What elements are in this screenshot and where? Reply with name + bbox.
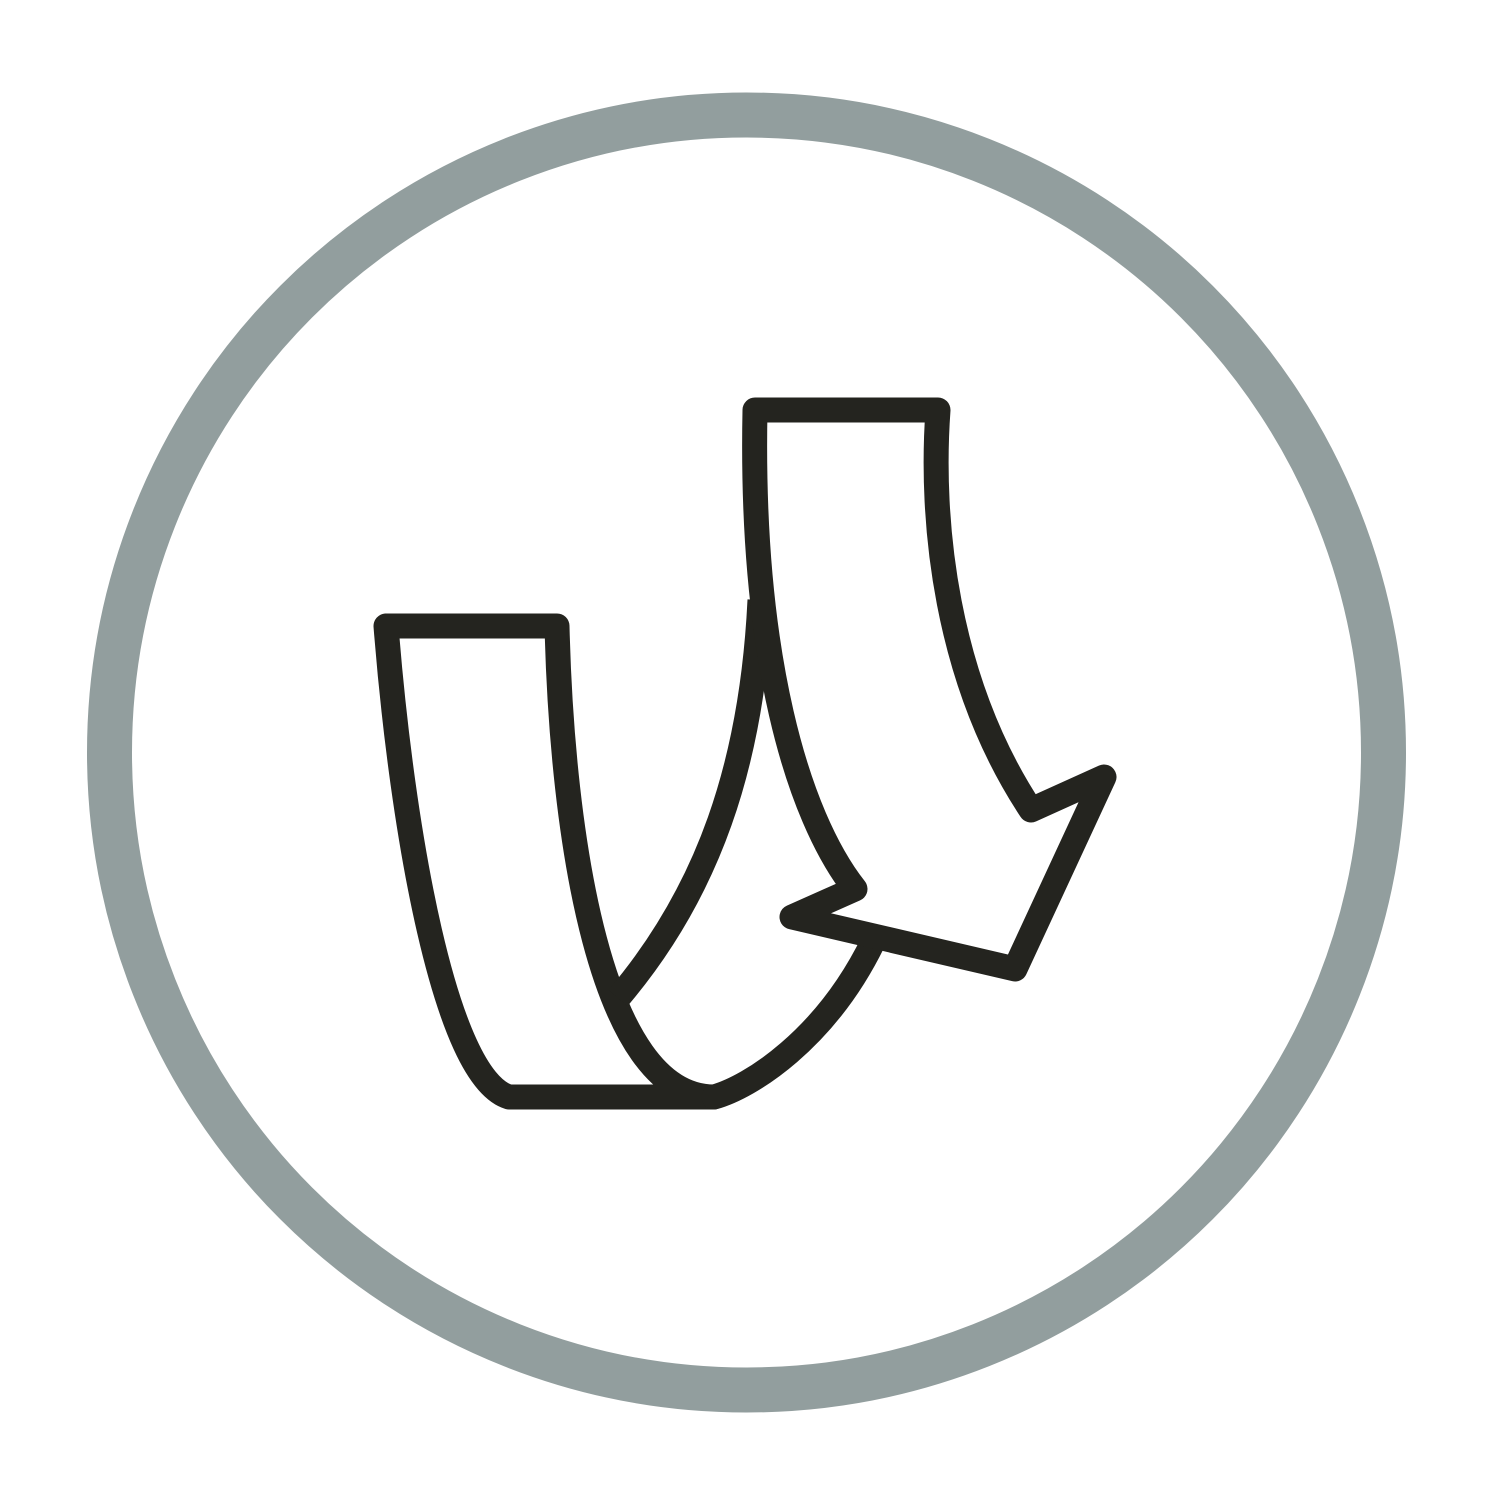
arrow head and upper band <box>755 410 1104 969</box>
middle ribbon fold <box>618 600 760 998</box>
icon: curved ribbon arrow <box>386 410 1104 1097</box>
lower ribbon curve <box>714 942 873 1097</box>
icon: grey circle ring <box>110 115 1384 1390</box>
left ribbon band <box>386 626 714 1097</box>
